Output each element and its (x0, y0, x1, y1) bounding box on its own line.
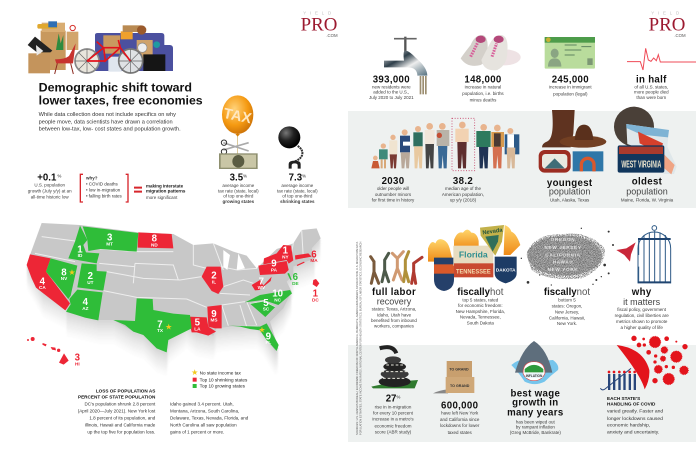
state rankings: UT (87, 280, 94, 285)
stat: youngest population (547, 178, 593, 203)
text: interstate migration: making interstate (146, 183, 184, 188)
panel: right page lower (355, 225, 688, 436)
stat: youngest population: youngest (547, 178, 593, 189)
map states: shrinking red (27, 232, 319, 336)
panel: left page top (28, 10, 338, 204)
icon: green card (545, 37, 595, 69)
stat: 2030: older people will (377, 186, 409, 191)
icon: flaming state plates: TENNESSEE (456, 269, 491, 276)
stat: 7.3 percent: shrinking states (280, 199, 315, 204)
stat: full labor recovery: benefited from inbound (371, 318, 417, 323)
state rankings: PA (271, 267, 278, 272)
stat: 38.2: American population, (442, 192, 484, 197)
state rankings: TX (157, 328, 164, 333)
stat: oldest population (621, 177, 674, 203)
stat: best wage growth (507, 388, 564, 418)
stat: 38.2: 38.2 (453, 176, 473, 187)
stat: 393,000: 393,000 (373, 74, 410, 85)
state rankings: 4 (40, 276, 46, 287)
bracket list: why: • low in-migration (86, 187, 121, 192)
stat: 27 percent: % (396, 395, 400, 400)
state rankings: 5 (263, 298, 269, 309)
icon: shattered state names: HAWAII (553, 260, 573, 265)
state rankings: LA (194, 326, 201, 331)
logo: Yield Pro right page: YIELD (651, 10, 683, 15)
text: interstate migration: more significant (146, 195, 178, 200)
state rankings: 9 (271, 259, 277, 270)
logo: Yield Pro right page: PRO (649, 15, 685, 36)
stat: fiscally not: California, Hawaii, (549, 315, 585, 320)
stat: fiscally hot: for economic freedom: (458, 303, 503, 308)
icon: heartbeat line (627, 48, 696, 70)
stat: 2030 (372, 176, 415, 203)
text: state COVID handling: varied greatly. Faster and (607, 409, 663, 415)
icon: boots and hat with Alaska and Utah plates (539, 110, 606, 173)
stat: fiscally not: fiscallynot (544, 287, 590, 298)
state rankings: 1 (313, 288, 319, 299)
state rankings: 2 (88, 271, 93, 282)
stat: 393,000: new residents were (372, 84, 411, 89)
stat: 148,000: 148,000 (464, 74, 502, 85)
icon: umbrella, people and virus (600, 336, 688, 390)
stat: youngest population: Utah, Alaska, Texas (550, 198, 590, 203)
legend (191, 368, 248, 389)
stat: 245,000: increase in immigrant (549, 84, 592, 89)
icon: coiled snake (371, 347, 418, 388)
state rankings: DE (292, 281, 299, 286)
state rankings: HI (75, 361, 80, 366)
panel: population map (27, 223, 321, 435)
stat: fiscally not: New Jersey, (555, 309, 579, 314)
panel: grey demographics band (348, 111, 696, 208)
text: gain column: Delaware, Texas, Nevada, Florida, and (170, 415, 249, 420)
stat: why it matters: regulation, civil liberties are (615, 313, 669, 318)
title: Demographic shift toward (39, 81, 192, 95)
state rankings: 3 (107, 232, 113, 243)
state rankings: 10 (272, 288, 283, 299)
icon: stacked moving boxes: TO GRAND (450, 384, 470, 388)
stat: 2030: for first time in history (372, 198, 415, 203)
stat: 245,000: 245,000 (552, 74, 589, 85)
stat: 7.3 percent: average income (281, 183, 314, 188)
stat: 600,000: lockdowns for lower (440, 423, 480, 428)
icon: shattered state names (521, 228, 614, 286)
text: wage caption: (Greg McBride, Bankrate) (510, 430, 561, 435)
state rankings: 9 (266, 331, 272, 342)
star markers: ★ (68, 268, 76, 277)
text: gain column: gains of 1 percent or more. (170, 430, 224, 435)
stat: why it matters (615, 287, 669, 330)
stat: 3.5 percent: tax rate (state, local) (218, 188, 259, 193)
text: wage caption (510, 419, 561, 435)
state rankings: NC (274, 298, 282, 303)
state rankings: NY (282, 254, 289, 259)
state rankings: 6 (293, 272, 299, 283)
text: state COVID handling: HANDLING OF COVID (607, 402, 656, 407)
state rankings: 7 (157, 320, 163, 331)
text: loss column: (April 2020—July 2021). New York lost (78, 408, 156, 413)
stat: oldest population: Maine, Florida, W. Virginia (621, 198, 674, 203)
state rankings: 9 (211, 309, 217, 320)
state rankings: CA (39, 285, 46, 290)
icon: shattered state names: OREGON (551, 237, 575, 242)
text: loss column: 1.8 percent of its population, and (89, 415, 156, 420)
stat: +0.1 percent: +0.1 (37, 173, 56, 184)
stat: full labor recovery (371, 287, 417, 329)
state rankings: 2 (211, 271, 217, 282)
stat: 600,000: taxed states (448, 430, 473, 435)
icon: flaming state plates: Florida (459, 249, 488, 259)
stat: +0.1 percent: U.S. population (34, 183, 66, 188)
stat: why it matters: it matters (623, 297, 661, 307)
stat: fiscally not: New York. (557, 321, 577, 326)
stat: 27 percent: for every 10 percent (373, 411, 414, 416)
stat: 7.3 percent: of top one-third (282, 194, 313, 199)
icon: Maine coin, Florida and West Virginia plates (614, 107, 677, 174)
stat: 27 percent: 27 (386, 394, 396, 405)
stat: full labor recovery: workers, companies (374, 324, 415, 329)
stat: fiscally not: bottom 5 (558, 297, 576, 302)
icon: shattered state names: NEW JERSEY (544, 245, 582, 250)
stat: 7.3 percent: 7.3 (289, 173, 302, 184)
star markers (68, 268, 266, 334)
icon: inflation shark: INFLATION (526, 374, 543, 378)
map states: Hawaii (27, 337, 69, 365)
stat: youngest population: population (549, 187, 590, 197)
stat: 148,000 (462, 74, 504, 102)
text: loss of population heading: PERCENT OF STATE POPULATION (78, 395, 156, 400)
icon: flaming state plates: Nevada (482, 228, 504, 236)
bracket list: why: • COVID deaths (86, 181, 118, 186)
illustration: population ages (371, 118, 519, 171)
state rankings: 4 (83, 297, 89, 308)
stat: in half: more people died (634, 90, 669, 95)
state rankings: 1 (77, 245, 83, 256)
state rankings: 8 (152, 234, 158, 245)
state rankings: MT (106, 241, 113, 246)
icon: tax balloon over cut dollar bill (219, 95, 258, 169)
map: extruded United States (27, 223, 321, 376)
stat: 600,000: and California since (440, 417, 480, 422)
title line two: lower taxes, free economies (39, 94, 203, 108)
intro text: people move, data scientists have drawn a correlation (39, 119, 173, 125)
stat: fiscally hot: Nevada, Tennessee, (460, 315, 501, 320)
state rankings: 1 (283, 246, 289, 257)
stat: why it matters: fiscal policy, government (617, 307, 667, 312)
stat: full labor recovery: full labor (372, 287, 416, 298)
stat: 393,000: July 2020 to July 2021 (369, 95, 414, 100)
icon: baby shoes (461, 35, 521, 70)
legend: Top 10 growing states (200, 384, 246, 389)
legend: ★ (191, 368, 198, 377)
text: gain column (170, 401, 249, 435)
stat: +0.1 percent: all-time historic low (31, 194, 69, 199)
stat: 3.5 percent: of top one-third (223, 194, 254, 199)
logo: Yield Pro left page: .COM (326, 33, 338, 38)
illustration: pile of moving boxes, sofa and bicycle (28, 21, 173, 74)
icon: shattered state names: CALIFORNIA (545, 252, 581, 257)
stat: why it matters: a higher quality of life (620, 325, 663, 330)
stat: 245,000 (549, 74, 592, 96)
stat: 2030: 2030 (382, 176, 404, 187)
stat: 38.2: up y/y (2018) (450, 198, 477, 203)
stat: fiscally hot: top 5 states, rated (462, 297, 499, 302)
stat: in half: in half (636, 74, 667, 85)
stat: +0.1 percent (28, 173, 72, 199)
text: loss column: DC's population shrunk 2.8 percent (84, 401, 156, 406)
logo: Yield Pro right page: .COM (674, 33, 686, 38)
text: gain column: Idaho gained 3.4 percent. Utah, (170, 401, 234, 406)
text: gain column: Montana, Arizona, South Carolina, (170, 408, 239, 413)
bracket list: why: why? (85, 176, 98, 181)
intro text: between low-tax, low- cost states and population growth. (39, 126, 181, 132)
icon: dancing workers (371, 252, 422, 283)
stat: 27 percent: rise in in-migration (375, 404, 412, 409)
state rankings: DC (312, 297, 319, 302)
state rankings: MS (211, 318, 217, 323)
source note (355, 242, 362, 435)
stat: best wage growth: growth in (512, 397, 559, 408)
state rankings: IL (212, 279, 216, 284)
stat: 393,000: added to the U.S., (373, 90, 409, 95)
stat: 7.3 percent: % (302, 174, 306, 179)
icon: stacked moving boxes (433, 361, 474, 393)
stat: 148,000: population, i.e. births (462, 91, 504, 96)
stat: fiscally hot (456, 287, 505, 326)
stat: best wage growth: many years (507, 407, 564, 418)
stat: 38.2: median age of the (445, 186, 481, 191)
stat: 393,000 (369, 74, 414, 100)
text: state COVID handling: economic hardship, (607, 423, 650, 429)
stat: 600,000: have left New York (441, 411, 479, 416)
intro text: While data collection does not include specifics on why (39, 112, 176, 118)
state rankings: 8 (61, 267, 67, 278)
stat: in half (634, 74, 669, 100)
panel: right page top (369, 10, 696, 203)
stat: 27 percent: increase in a metro's (372, 417, 414, 422)
stat: in half: than were born (636, 95, 667, 100)
stat: 3.5 percent: % (243, 174, 247, 179)
stat: +0.1 percent: % (56, 174, 62, 179)
stat: 600,000: 600,000 (441, 400, 478, 411)
icon: tax balloon over cut dollar bill: TAX (222, 106, 253, 127)
text: state COVID handling (607, 396, 663, 436)
stat: oldest population: oldest (632, 177, 663, 188)
icon: stacked moving boxes: TO GRAND (449, 367, 469, 371)
state rankings: 7 (259, 277, 264, 288)
text: wage caption: by rampant inflation (516, 425, 555, 430)
stat: fiscally hot: South Dakota (467, 321, 494, 326)
state rankings: MA (310, 258, 318, 263)
stat: 3.5 percent: average income (222, 183, 255, 188)
stat: 27 percent: economic freedom (375, 423, 412, 428)
text: loss column: Illinois, Hawaii and California made (85, 422, 156, 427)
source note: POPULATION ESTIMATES, STATE INCOME TAX RATES, NATIONAL CENTER FOR HEALTH STATISTICS, BUREAU OF LABOR STATISTICS, ECONOMIC RESEARCH (358, 242, 362, 435)
text: loss column (78, 401, 156, 435)
stat: full labor recovery: recovery (377, 296, 412, 306)
stat: fiscally hot: fiscallyhot (457, 287, 504, 298)
stat: 148,000: minus deaths (470, 97, 497, 102)
state rankings: SC (263, 307, 270, 312)
state rankings: AZ (82, 306, 89, 311)
map states: growing green (46, 226, 292, 352)
stat: 27 percent (372, 394, 414, 435)
icon: flaming state plates: DAKOTA (496, 268, 516, 273)
stat: 27 percent: score (ABR study) (375, 430, 412, 435)
stat: 245,000: population (legal) (553, 91, 588, 96)
legend: Top 10 shrinking states (200, 377, 248, 382)
stat: full labor recovery: Idaho, Utah have (377, 313, 412, 318)
icon: shattered state names: NEW YORK (548, 267, 578, 272)
stat: full labor recovery: states: Texas, Arizona, (372, 306, 416, 311)
stat: 3.5 percent (218, 173, 259, 204)
stat: why it matters: why (631, 287, 652, 298)
icon: faucet with coins (384, 37, 427, 94)
source note: SOURCES: U.S. CENSUS BUREAU, ECONOMIC FREEDOM OF NORTH AMERICA, BANKRATE, AMERICAN BANKERS ASSOCIATION, U.S. MIGRATION DATA (355, 242, 359, 435)
stat: 38.2 (442, 176, 484, 203)
stat: 7.3 percent (277, 173, 318, 204)
logo: Yield Pro left page: YIELD (303, 10, 335, 15)
panel: grey bottom band (348, 345, 696, 442)
stat: oldest population: population (626, 187, 668, 197)
logo: Yield Pro left page: PRO (301, 15, 337, 36)
star markers: ★ (165, 322, 172, 331)
bracket list: why (80, 174, 128, 202)
stat: 600,000 (440, 400, 480, 435)
icon: ball and chain (278, 126, 302, 169)
state rankings: 3 (75, 352, 81, 363)
text: loss of population heading: LOSS OF POPULATION AS (96, 389, 155, 394)
stat: 2030: outnumber minors (375, 192, 412, 197)
stat: 7.3 percent: tax rate (state, local) (277, 188, 318, 193)
stat: 3.5 percent: 3.5 (230, 173, 243, 184)
text: loss of population heading (78, 389, 156, 400)
stat: why it matters: metrics shown to promote (616, 319, 668, 324)
text: interstate migration (146, 183, 186, 200)
star markers: ★ (258, 325, 266, 334)
stat: 148,000: increase in natural (465, 84, 501, 89)
text: wage caption: has been wiped out (516, 419, 556, 424)
stat: best wage growth: best wage (510, 388, 560, 399)
text: gain column: North Carolina all saw population (170, 422, 237, 427)
intro text (39, 112, 181, 132)
state rankings: 6 (311, 249, 317, 260)
text: state COVID handling: EACH STATE'S (607, 396, 640, 401)
icon: inflation shark (511, 341, 558, 384)
state rankings: ID (78, 253, 83, 258)
stat: fiscally hot: New Hampshire, Florida, (456, 309, 505, 314)
text: state COVID handling: longer lockdowns caused (607, 416, 663, 422)
icon: bird leaving cage (616, 226, 671, 283)
stat: +0.1 percent: growth (July y/y) at an (28, 188, 72, 193)
state rankings: 5 (195, 318, 201, 329)
text: loss column: up the top five for population loss. (87, 430, 155, 435)
text: state COVID handling: anxiety and uncertainty. (607, 430, 659, 436)
text: interstate migration: migration patterns (146, 189, 186, 194)
state rankings: WV (258, 285, 266, 290)
stat: fiscally not (544, 287, 590, 326)
icon: Maine coin, Florida and West Virginia plates: WEST VIRGINIA (621, 159, 661, 170)
state rankings: FL (265, 340, 271, 345)
stat: 3.5 percent: growing states (223, 199, 255, 204)
state rankings: NV (61, 276, 68, 281)
state rankings (39, 232, 319, 366)
stat: in half: of all U.S. states, (634, 84, 668, 89)
icon: flaming state plates (428, 225, 520, 291)
equals sign (134, 187, 142, 193)
legend: No state income tax (200, 370, 241, 375)
state rankings: ND (151, 243, 158, 248)
bracket list: why: • falling birth rates (86, 193, 122, 198)
stat: fiscally not: states: Oregon, (552, 304, 582, 309)
